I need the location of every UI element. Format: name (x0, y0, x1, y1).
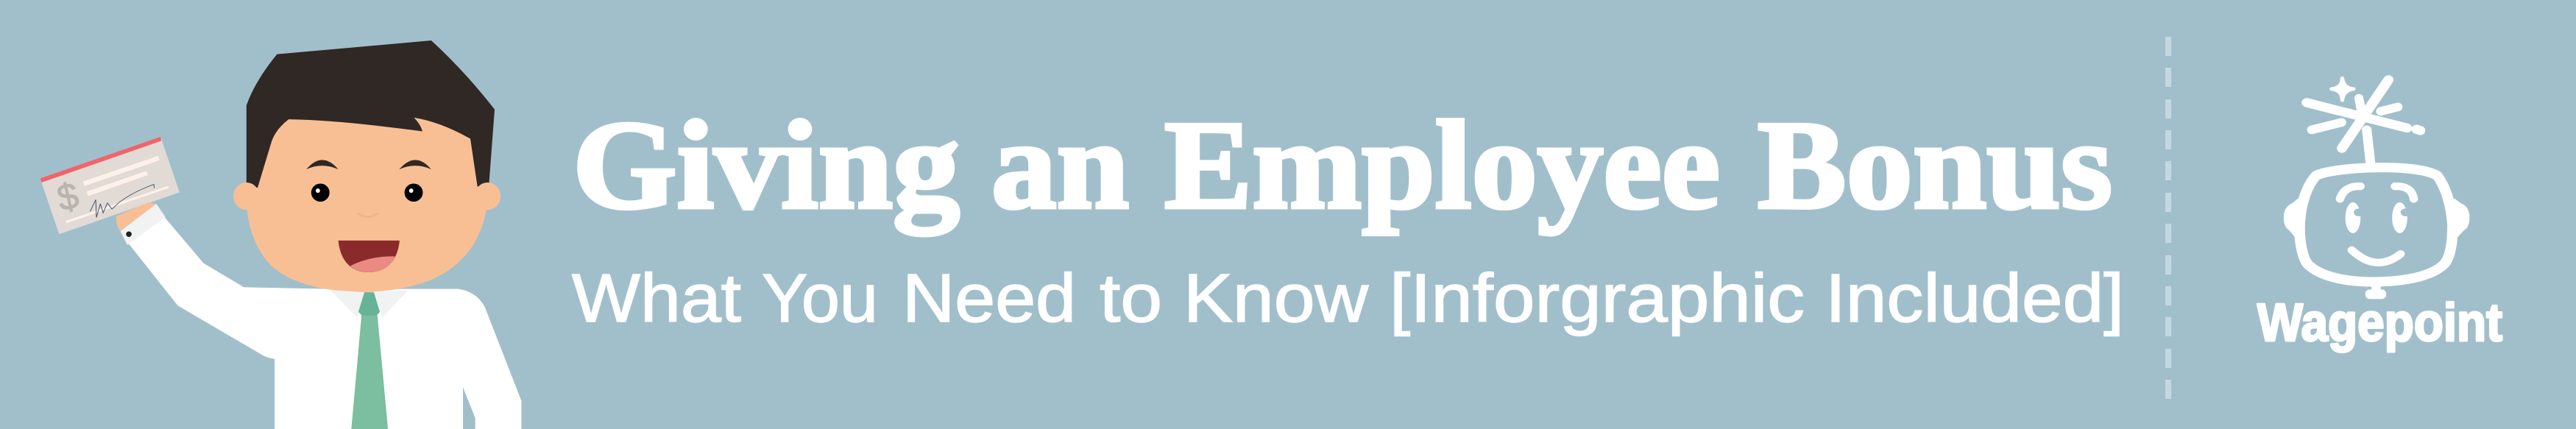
title: Giving (573, 96, 960, 235)
dashed divider (2165, 37, 2171, 399)
subtitle: Included] (1825, 260, 2124, 336)
character: businessman holding cheque (40, 40, 521, 429)
collar and tie (330, 290, 408, 429)
title (573, 96, 2112, 235)
title: an (991, 96, 1129, 235)
subtitle (572, 260, 2124, 336)
cheque (40, 137, 180, 234)
head (233, 40, 500, 292)
subtitle: What (572, 260, 741, 336)
title: Employee (1164, 96, 1720, 235)
subtitle: Know (1183, 260, 1369, 336)
icon: robot head with spark (2284, 78, 2469, 299)
subtitle: Need (902, 260, 1076, 336)
subtitle: You (762, 260, 878, 336)
subtitle: to (1100, 260, 1162, 336)
subtitle: [Inforgraphic (1390, 260, 1805, 336)
body and shirt (116, 202, 521, 429)
logo wordmark: Wagepoint (2257, 294, 2502, 352)
logo: Wagepoint robot (2257, 78, 2502, 352)
title: Bonus (1758, 96, 2112, 235)
cheque: $ (53, 174, 82, 219)
